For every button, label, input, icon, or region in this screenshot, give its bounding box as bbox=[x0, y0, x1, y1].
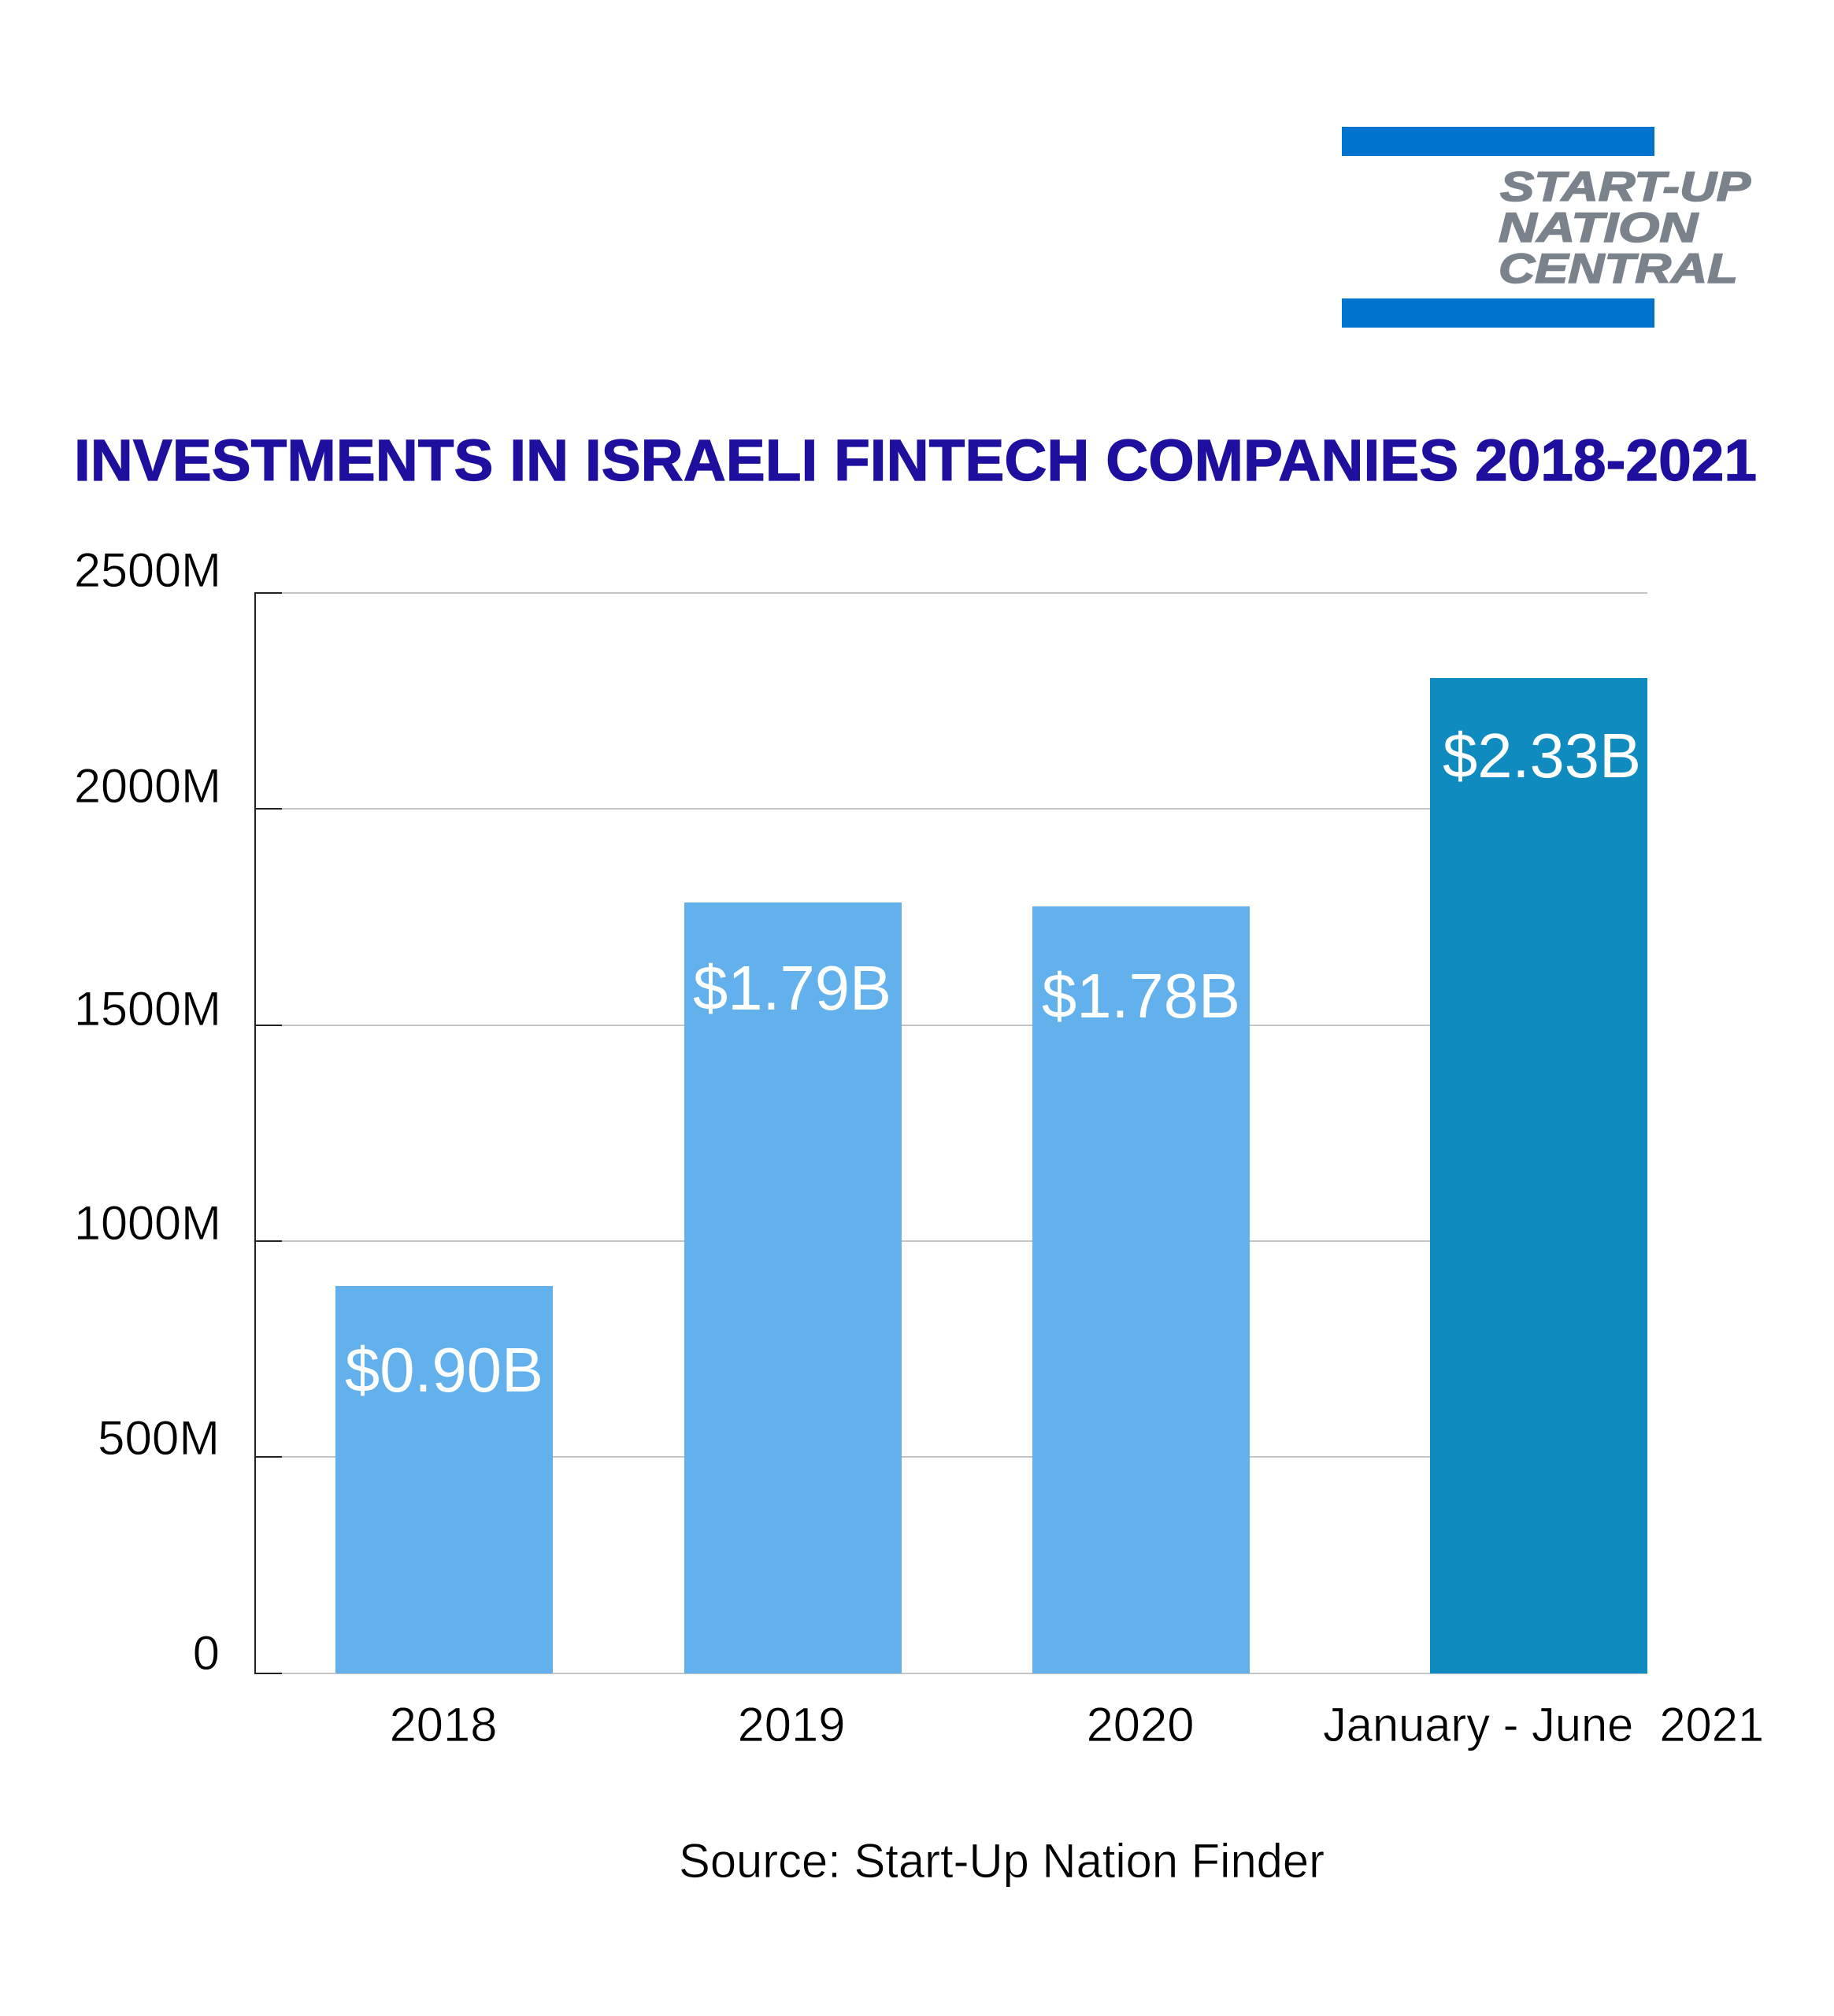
y axis labels: 2000M bbox=[74, 759, 221, 813]
logo: Start-Up Nation Central: CENTRAL bbox=[1499, 246, 1738, 292]
y axis labels: 1500M bbox=[74, 982, 221, 1036]
logo: Start-Up Nation Central: NATION bbox=[1499, 205, 1699, 251]
y axis labels: 1000M bbox=[74, 1196, 221, 1251]
y axis labels: 500M bbox=[98, 1411, 220, 1466]
logo: Start-Up Nation Central: START-UP bbox=[1500, 164, 1751, 210]
bar: 2020: $1.78B bbox=[1042, 961, 1240, 1031]
bar: 2018 bbox=[335, 1286, 553, 1673]
y axis gridlines bbox=[254, 592, 1647, 1674]
y axis labels: 0 bbox=[193, 1626, 220, 1681]
x axis labels: January - June 2021 bbox=[1323, 1698, 1764, 1752]
title: INVESTMENTS IN ISRAELI FINTECH COMPANIES 2018-2021 bbox=[74, 428, 1757, 493]
bar: January - June 2021: $2.33B bbox=[1443, 721, 1641, 791]
x axis labels: 2018 bbox=[390, 1698, 497, 1752]
logo: Start-Up Nation Central bbox=[1342, 127, 1751, 328]
bar: 2019: $1.79B bbox=[693, 953, 891, 1023]
bar: 2019 bbox=[684, 902, 902, 1673]
bar: 2018: $0.90B bbox=[345, 1335, 543, 1405]
bar: 2020 bbox=[1032, 906, 1250, 1673]
x axis labels bbox=[390, 1698, 1764, 1752]
source note: Source: Start-Up Nation Finder bbox=[679, 1834, 1325, 1888]
y axis labels bbox=[74, 543, 221, 1681]
bar chart bbox=[74, 543, 1764, 1752]
x axis labels: 2019 bbox=[738, 1698, 845, 1752]
bar: January - June 2021 bbox=[1430, 678, 1647, 1673]
x axis labels: 2020 bbox=[1087, 1698, 1194, 1752]
y axis labels: 2500M bbox=[74, 543, 221, 598]
